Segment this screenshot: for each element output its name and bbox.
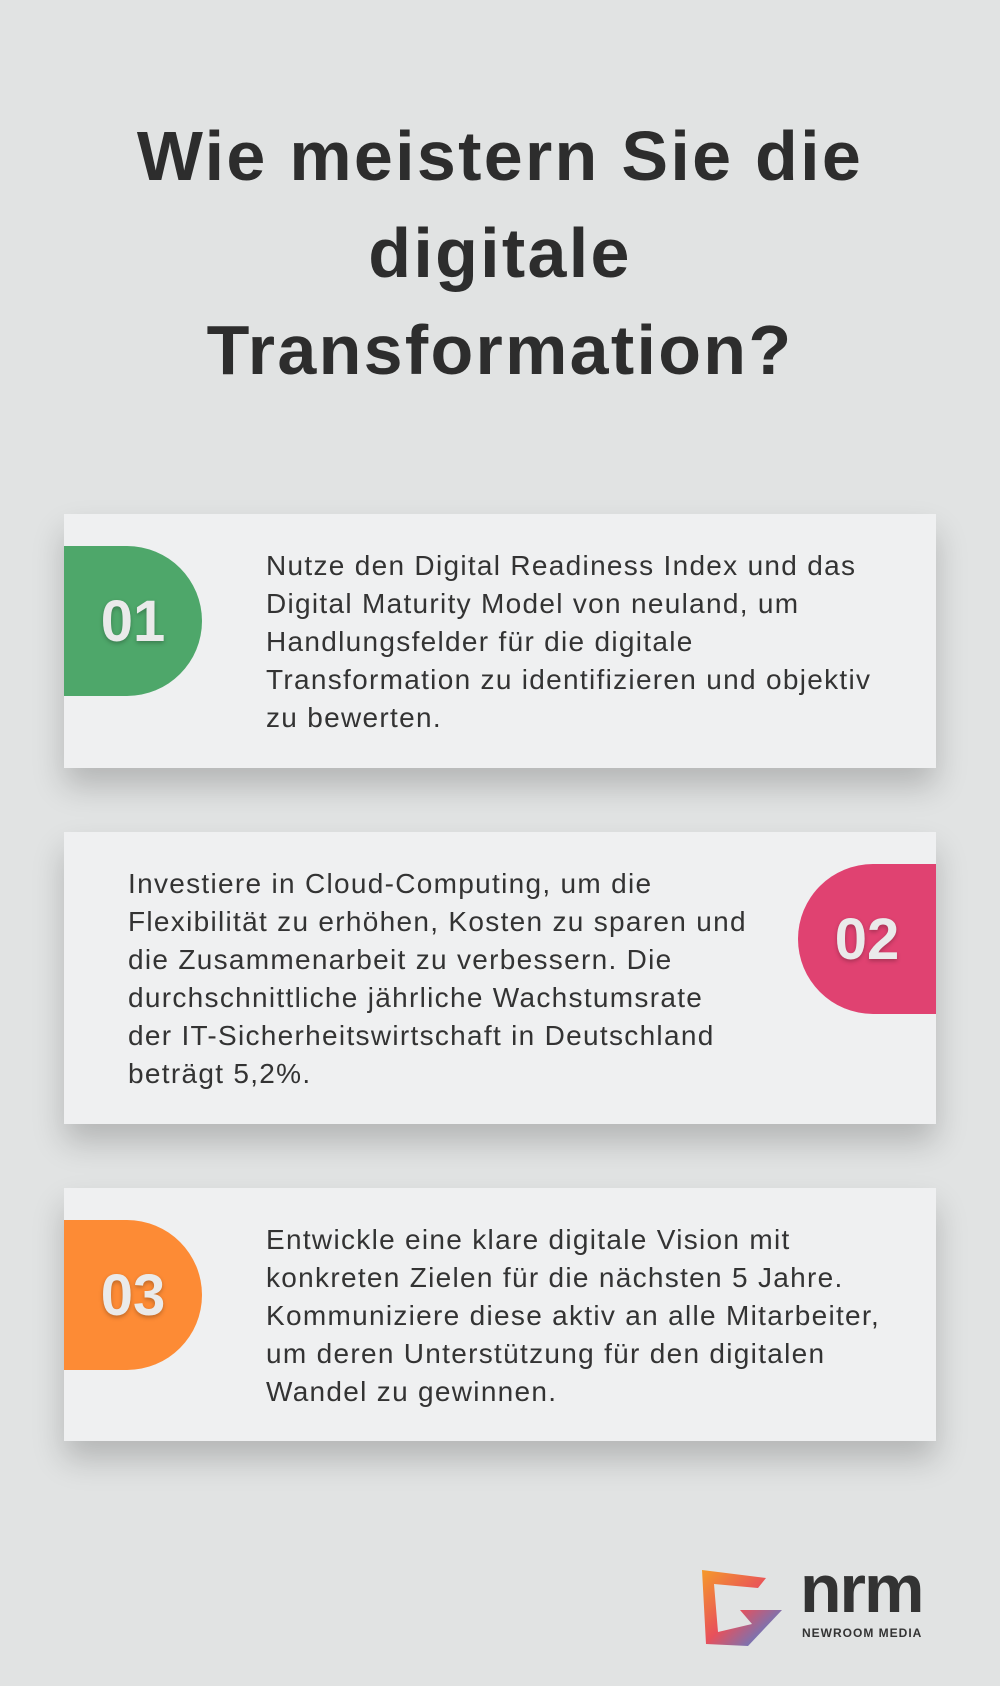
- panel: step 01: [64, 514, 936, 768]
- badge 02: [798, 864, 936, 1014]
- text 01: Digital Maturity Model von neuland, um: [266, 588, 799, 619]
- text 01: Nutze den Digital Readiness Index und das: [266, 550, 856, 581]
- text 01: Handlungsfelder für die digitale: [266, 626, 694, 657]
- badge 02: 02: [835, 906, 899, 972]
- text 02: [128, 868, 747, 1089]
- title: digitale: [368, 214, 632, 292]
- text 02: die Zusammenarbeit zu verbessern. Die: [128, 944, 673, 975]
- badge 01: [64, 546, 202, 696]
- logo: NEWROOM MEDIA: [802, 1626, 922, 1640]
- text 03: Entwickle eine klare digitale Vision mit: [266, 1224, 791, 1255]
- badge 03: [64, 1220, 202, 1370]
- badge 03: 03: [101, 1262, 165, 1328]
- text 03: [266, 1224, 880, 1407]
- badge 01: 01: [101, 588, 165, 654]
- text 03: Wandel zu gewinnen.: [266, 1376, 557, 1407]
- icon: logo mark: [702, 1570, 782, 1646]
- panel: step 03: [64, 1188, 936, 1441]
- title: Wie meistern Sie die: [137, 117, 863, 195]
- title: [137, 117, 863, 389]
- text 02: Flexibilität zu erhöhen, Kosten zu sparen und: [128, 906, 747, 937]
- text 03: Kommuniziere diese aktiv an alle Mitarbeiter,: [266, 1300, 880, 1331]
- text 03: konkreten Zielen für die nächsten 5 Jahre.: [266, 1262, 844, 1293]
- text 01: [266, 550, 871, 733]
- text 02: beträgt 5,2%.: [128, 1058, 311, 1089]
- text 03: um deren Unterstützung für den digitalen: [266, 1338, 825, 1369]
- text 02: durchschnittliche jährliche Wachstumsrate: [128, 982, 703, 1013]
- logo: [702, 1551, 922, 1646]
- text 02: der IT-Sicherheitswirtschaft in Deutschland: [128, 1020, 715, 1051]
- title: Transformation?: [207, 311, 793, 389]
- panel: step 02: [64, 832, 936, 1124]
- logo text: nrm: [800, 1551, 922, 1627]
- text 01: Transformation zu identifizieren und objektiv: [266, 664, 871, 695]
- text 02: Investiere in Cloud-Computing, um die: [128, 868, 652, 899]
- text 01: zu bewerten.: [266, 702, 442, 733]
